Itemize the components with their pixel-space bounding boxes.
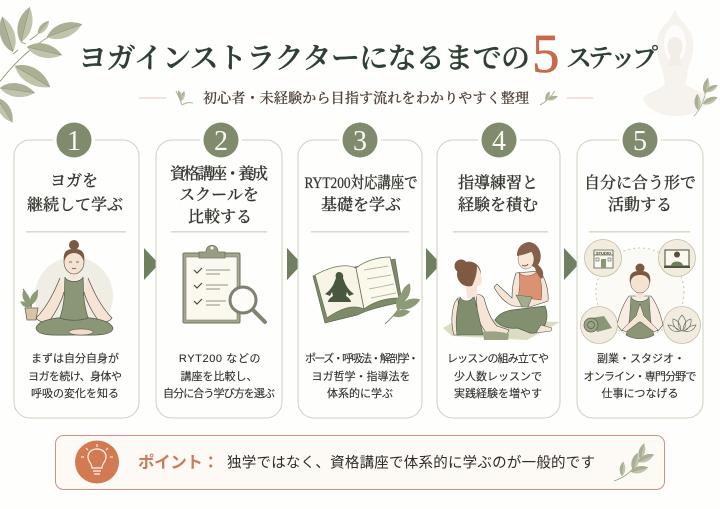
point text: 独学ではなく、資格講座で体系的に学ぶのが一般的です (227, 454, 595, 472)
callout: point (56, 436, 664, 490)
icon: meditating person (19, 240, 113, 335)
step 5 heading: 活動する (608, 196, 672, 214)
title: 5 (532, 23, 560, 84)
step 5 heading: 自分に合う形で (584, 174, 696, 192)
step 2 description: 自分に合う学び方を選ぶ (163, 386, 275, 400)
decoration: faint yoga silhouette (643, 9, 708, 116)
step 2 heading: 資格講座・養成 (170, 164, 268, 183)
step 1 description: ヨガを続け、身体や (28, 369, 122, 383)
step 1 heading: 継続して学ぶ (27, 196, 123, 214)
step 4 number: 4 (492, 126, 506, 157)
step 5 description: 仕事につなげる (602, 387, 678, 400)
title: ヨガインストラクターになるまでの (78, 43, 530, 75)
point label: ポイント： (138, 452, 219, 472)
step 2 description: 講座を比較し、 (180, 369, 258, 383)
step 3 heading: RYT200対応講座で (304, 174, 418, 192)
step 4 description: 実践経験を増やす (454, 386, 542, 400)
step 3 number: 3 (353, 126, 367, 157)
icon: open book with pose and leaves (313, 257, 422, 324)
person (617, 296, 663, 331)
icon: light bulb (75, 440, 119, 484)
panel: step 5 (577, 119, 703, 418)
panel: step 3 (298, 119, 422, 418)
step 5 description: 副業・スタジオ・ (597, 352, 685, 365)
mat (443, 318, 560, 340)
step 3 description: ヨガ哲学・指導法を (312, 369, 410, 383)
step 4 number (478, 119, 520, 161)
leaf sprig (614, 443, 655, 481)
step 3 description: 体系的に学ぶ (327, 386, 393, 400)
step 5 description: オンライン・専門分野で (584, 370, 696, 383)
step 5 number: 5 (633, 126, 647, 157)
step 2 number: 2 (214, 126, 228, 157)
icon: career paths (580, 240, 700, 344)
lotus icon (664, 306, 700, 344)
legs (36, 317, 113, 335)
step 4 heading: 指導練習と (458, 173, 538, 192)
online icon (658, 240, 696, 276)
step 1 heading: ヨガを (50, 172, 98, 190)
subtitle (139, 90, 593, 107)
arms (36, 278, 112, 322)
arrow 2 (287, 248, 302, 280)
step 1 number: 1 (67, 126, 81, 157)
plant (19, 289, 40, 320)
panel: step 1 (14, 119, 139, 418)
decoration: top-left leaf branch (0, 5, 84, 125)
step 2 heading: スクールを (179, 186, 259, 204)
arrow 3 (426, 248, 441, 280)
title (78, 23, 658, 84)
panel: step 4 (437, 119, 560, 418)
step 1 description: まずは自分自身が (31, 351, 119, 365)
leaves (385, 290, 406, 324)
step 4 description: 少人数レッスンで (454, 369, 542, 383)
title: ステップ (566, 44, 658, 73)
panel: step 2 (156, 119, 282, 418)
teacher (494, 271, 548, 307)
student (452, 294, 509, 337)
torso (60, 277, 88, 320)
feet (69, 329, 93, 335)
step 4 heading: 経験を積む (458, 196, 538, 214)
icon: teacher and student (443, 242, 560, 340)
step 3 number (339, 119, 381, 161)
step 5 number (619, 119, 661, 161)
neck and head (70, 266, 78, 278)
step 2 description: RYT200 などの (179, 352, 261, 365)
step 3 description: ポーズ・呼吸法・解剖学・ (305, 351, 419, 365)
subtitle: 初心者・未経験から目指す流れをわかりやすく整理 (203, 90, 529, 107)
arrow 1 (144, 248, 159, 280)
yoga mat icon (580, 306, 618, 344)
step 2 number (200, 119, 242, 161)
step 4 description: レッスンの組み立てや (447, 351, 549, 365)
studio icon: STUDIO (596, 250, 611, 255)
meditation silhouette (325, 272, 354, 302)
icon: clipboard with magnifier (183, 245, 265, 323)
step 3 heading: 基礎を学ぶ (321, 195, 401, 214)
step 1 description: 呼吸の変化を知る (31, 386, 119, 400)
step 1 number (53, 119, 95, 161)
arrow 4 (564, 248, 579, 280)
step 2 heading: 比較する (188, 208, 252, 226)
decoration: small leaf sprig top right (694, 78, 719, 116)
